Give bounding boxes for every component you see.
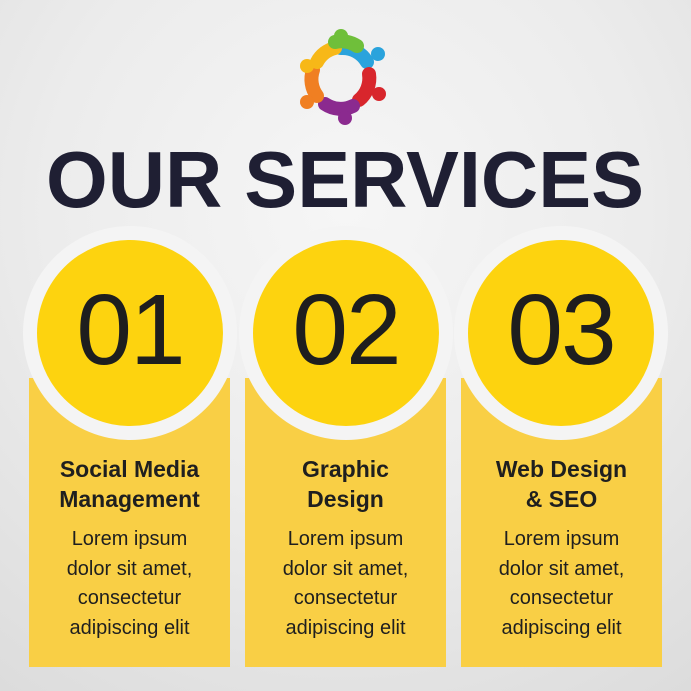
text 02: consectetur [294,587,397,609]
text 03: consectetur [510,587,613,609]
panel: 01 [23,240,230,667]
panel: 03 [461,240,668,667]
text 02: Lorem ipsum [288,528,403,550]
text 02 [283,456,408,638]
text 01: adipiscing elit [69,616,190,638]
text 03: & SEO [526,486,597,512]
text 02: dolor sit amet, [283,558,408,580]
text 02: adipiscing elit [285,616,406,638]
text 02: Graphic [302,456,389,482]
text 01: dolor sit amet, [67,558,192,580]
title: OUR SERVICES [46,135,644,223]
text 03: Web Design [496,456,627,482]
circle 01: 01 [76,274,184,386]
text 02: Design [307,486,384,512]
text 01: Social Media [60,456,199,482]
circle 01 [23,226,237,440]
text 03 [496,456,627,638]
circle 03 [454,226,668,440]
text 03: Lorem ipsum [504,528,619,550]
logo: people circle [300,29,386,125]
text 01: consectetur [78,587,181,609]
panel: 02 [245,240,446,667]
circle 03: 03 [507,274,615,386]
text 01: Management [59,486,200,512]
text 01 [59,456,200,638]
text 03: dolor sit amet, [499,558,624,580]
circle 02 [239,226,453,440]
circle 02: 02 [292,274,400,386]
text 01: Lorem ipsum [72,528,187,550]
text 03: adipiscing elit [501,616,622,638]
